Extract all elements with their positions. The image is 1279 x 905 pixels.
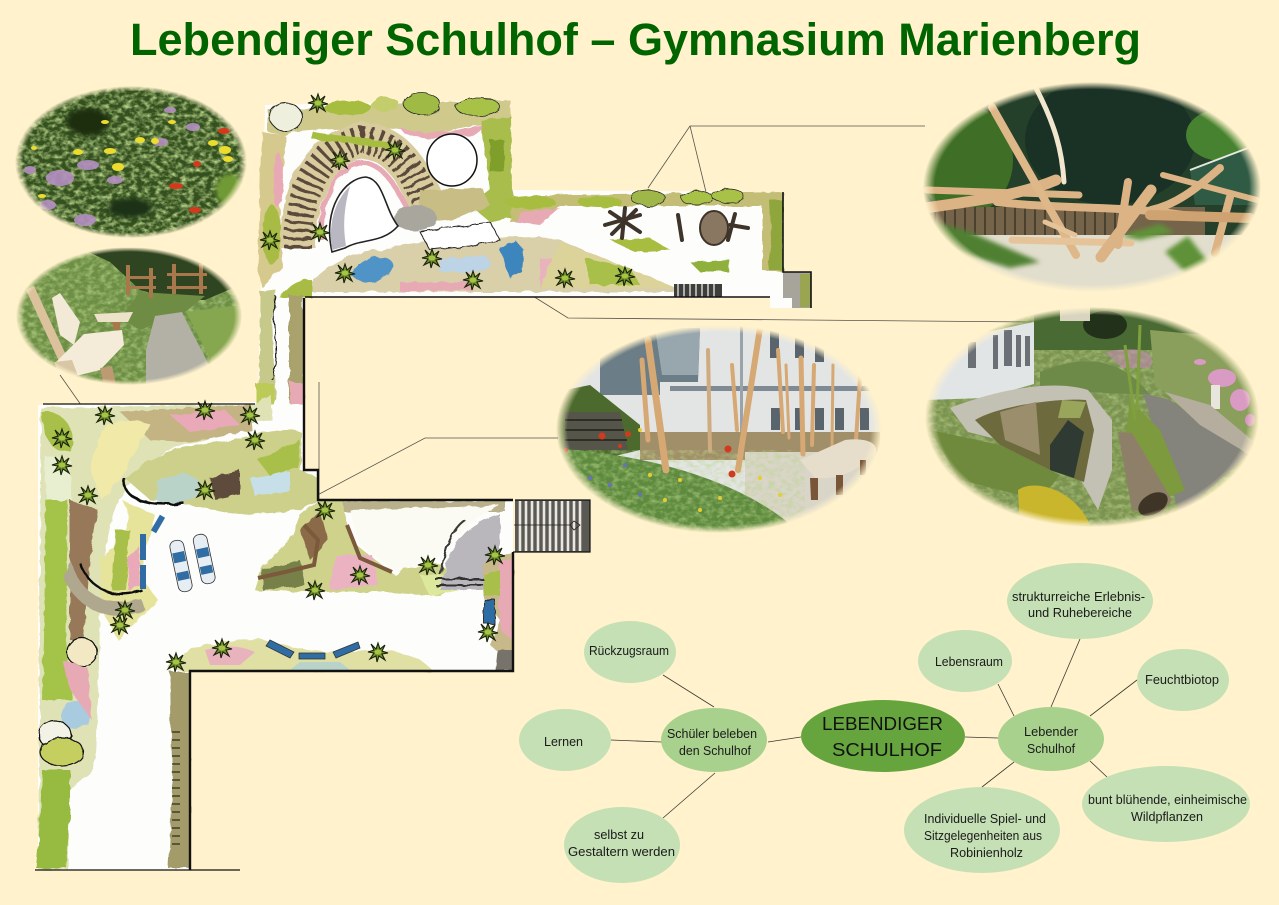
bubble: Lebensraum [918,630,1012,692]
bubble: bunt blühende, einheimische Wildpflanzen: Wildpflanzen [1131,809,1203,824]
plan: planting tufts [52,94,635,672]
bubble: Individuelle Spiel- und Sitzgelegenheiten aus Robinienholz: Sitzgelegenheiten aus [924,828,1042,843]
mind map connector lines [611,639,1137,818]
bubble: Individuelle Spiel- und Sitzgelegenheiten aus Robinienholz: Individuelle Spiel- und [924,811,1046,826]
plan: black walls [35,192,811,870]
bubble: Feuchtbiotop [1137,649,1229,711]
bubble: Individuelle Spiel- und Sitzgelegenheiten aus Robinienholz: Robinienholz [950,845,1023,860]
photo: robinia poles at school building [552,322,887,540]
photo: pond biotope [920,305,1270,530]
bubble: Lernen: Lernen [544,734,583,749]
plan: stairs south [514,500,590,552]
bubble: Lebender Schulhof [998,707,1104,771]
plan: corner and stairs east [674,272,811,308]
plan: picnic benches [140,515,216,593]
plan: connecting corridor [256,290,304,404]
leader lines from plan to photos [60,126,1035,552]
bubble: Individuelle Spiel- und Sitzgelegenheiten aus Robinienholz [904,787,1060,873]
bubble: Lernen [519,709,611,771]
bubble: strukturreiche Erlebnis- und Ruhebereiche: strukturreiche Erlebnis- [1012,589,1145,604]
plan: paved white base [38,100,811,870]
bubble: Lebensraum: Lebensraum [935,654,1003,669]
bubble: bunt blühende, einheimische Wildpflanzen [1082,766,1250,842]
plan: olive strip with steps [168,672,190,868]
bubble: Rückzugsraum: Rückzugsraum [589,643,669,658]
plan: west side beds [36,394,272,870]
plan: upper courtyard beds [258,93,520,288]
bubble: Lebendiger Schulhof: SCHULHOF [832,739,942,760]
plan: wood edge logs [258,525,392,578]
bubble: Lebendiger Schulhof: LEBENDIGER [822,713,943,734]
bubble: Lebender Schulhof: Schulhof [1027,741,1075,756]
bubble: Schüler beleben den Schulhof [661,708,767,772]
bubble: selbst zu Gestaltern werden [564,807,680,883]
bubble: strukturreiche Erlebnis- und Ruhebereiche: und Ruhebereiche [1028,605,1132,620]
mind map [519,563,1250,883]
bubble: bunt blühende, einheimische Wildpflanzen: bunt blühende, einheimische [1088,792,1247,807]
photo: wildflower meadow [14,85,248,239]
bubble: Schüler beleben den Schulhof: den Schulhof [679,743,751,758]
bubble: Lebendiger Schulhof [801,700,965,772]
plan: south-east beds [255,500,513,670]
plan: east wing beds [505,189,783,288]
title: Lebendiger Schulhof – Gymnasium Marienberg [130,14,1141,65]
plan: bottom bed with blue benches [168,640,433,672]
bubble: Lebender Schulhof: Lebender [1024,724,1079,739]
bubble: selbst zu Gestaltern werden: selbst zu [594,827,644,842]
garden plan sketch [35,93,811,870]
photo: benches and path [14,246,244,386]
plan: boulder [427,134,477,186]
pond: water [975,400,1094,482]
photo: robinia climbing structure [924,82,1260,290]
plan: central plaza semicircle [330,177,398,252]
plan: bed with dark arc [64,429,318,640]
bubble: selbst zu Gestaltern werden: Gestaltern werden [568,844,675,859]
bubble: Feuchtbiotop: Feuchtbiotop [1145,672,1219,687]
pond: stone rim [950,385,1112,510]
bubble: Schüler beleben den Schulhof: Schüler beleben [667,726,757,741]
bubble: Rückzugsraum [584,621,676,683]
bubble: strukturreiche Erlebnis- und Ruhebereiche [1007,563,1153,639]
plan: pond and stream band [280,222,676,298]
plan: wooden play sculptures [605,208,748,245]
